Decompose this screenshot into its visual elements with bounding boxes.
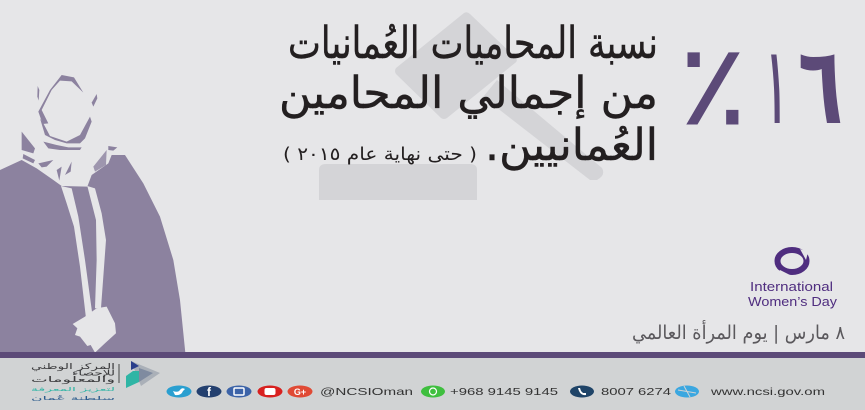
- toll free number: 8007 6274: [601, 386, 671, 398]
- logo text: NCSI: [31, 362, 116, 402]
- icon: twitter: [166, 386, 192, 398]
- social icons: [166, 385, 312, 399]
- heading: percentage statement: من إجمالي المحامين: [279, 68, 658, 119]
- icon: youtube: [258, 386, 282, 398]
- date line: March 8: ٨ مارس | يوم المرأة العالمي: [632, 320, 845, 344]
- website: www.ncsi.gov.om: [710, 386, 825, 398]
- figure: woman in robe: [0, 75, 185, 353]
- big statistic: 16%: ٪: [679, 21, 747, 151]
- scarf strap left: [61, 186, 93, 318]
- logo text: NCSI: سلطنة عُمان: [31, 395, 116, 402]
- hood shading: [22, 75, 117, 181]
- label: International Women's Day: International: [750, 280, 833, 294]
- icon: facebook: [196, 385, 222, 399]
- note: until end of 2015: ( حتى نهاية عام ٢٠١٥ ): [283, 144, 477, 165]
- icon: google plus: G+: [294, 387, 306, 397]
- icon: instagram: [226, 386, 252, 398]
- heading: percentage statement: العُمانيين.: [485, 120, 658, 171]
- label: International Women's Day: Women’s Day: [748, 295, 838, 309]
- hand: [73, 307, 116, 353]
- robe: [0, 155, 185, 353]
- icon: google plus: [288, 386, 312, 398]
- heading: percentage statement: نسبة المحاميات العُمانيات: [288, 18, 658, 69]
- icon: globe: [675, 386, 699, 398]
- handle: @NCSIOman: @NCSIOman: [320, 386, 413, 398]
- icon: facebook: f: [207, 385, 212, 399]
- logo text: NCSI: لتعزيز المعرفة: [31, 387, 116, 393]
- icon: whatsapp: [421, 386, 445, 398]
- heading: percentage statement: [279, 18, 658, 171]
- big statistic: 16%: [679, 21, 843, 151]
- logo text: NCSI: والمعلومات: [31, 375, 115, 384]
- logo mark: NCSI: [118, 361, 160, 388]
- big statistic: 16%: ١: [767, 24, 785, 149]
- gavel watermark: [319, 12, 603, 200]
- whatsapp number: +968 9145 9145: [450, 386, 558, 398]
- logo text: NCSI: المركز الوطني: [31, 362, 115, 371]
- label: International Women's Day: [748, 280, 838, 309]
- footer band: [0, 352, 865, 410]
- icon: phone: [570, 386, 594, 398]
- scarf strap right: [87, 186, 106, 308]
- big statistic: 16%: ٦: [798, 24, 843, 149]
- logo text: NCSI: للإحصاء: [72, 368, 115, 378]
- icon: International Women's Day ring: [776, 249, 808, 276]
